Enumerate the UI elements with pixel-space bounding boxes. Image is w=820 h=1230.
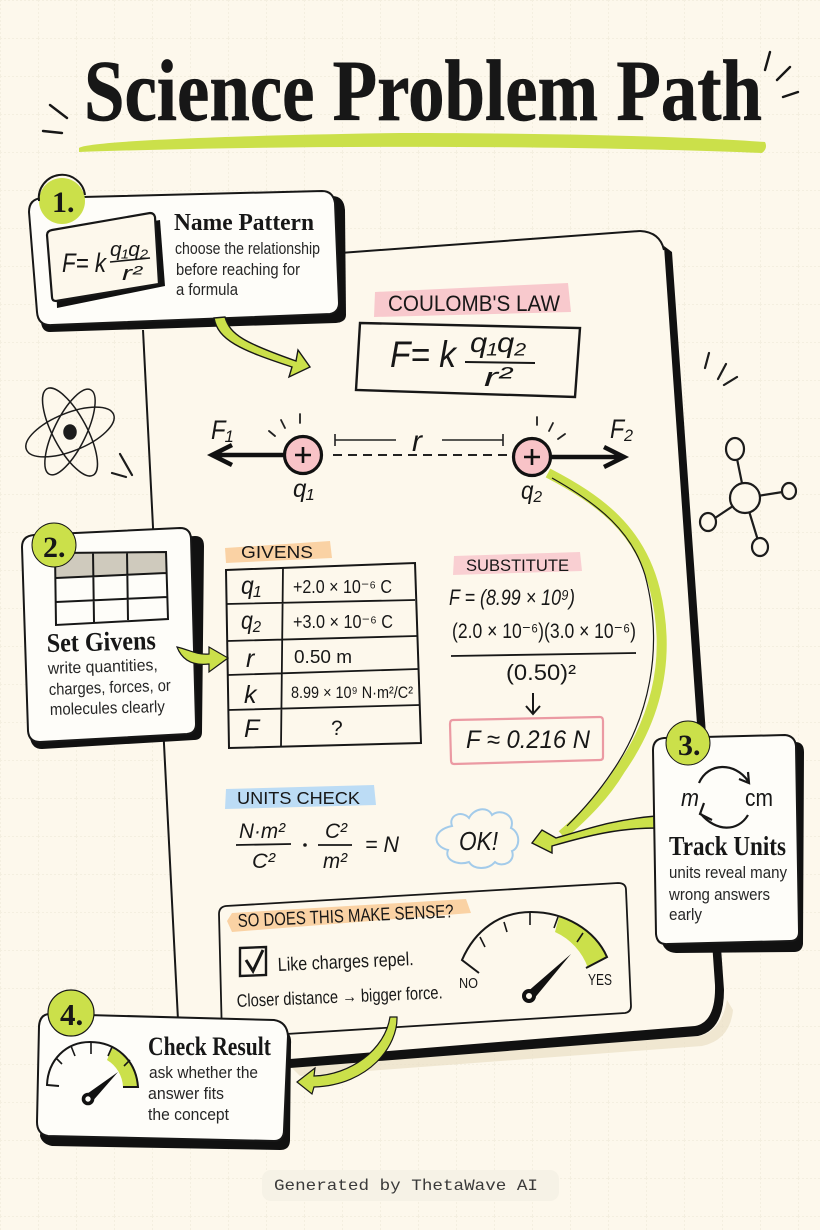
badge 4: 4. bbox=[60, 997, 83, 1032]
givens table: ? bbox=[331, 717, 343, 740]
card 4: check result: Check Result bbox=[148, 1032, 271, 1061]
charge diagram: r bbox=[412, 425, 423, 458]
formula box bbox=[356, 323, 580, 397]
card 1: name pattern bbox=[29, 175, 346, 332]
givens table: 0.50 m bbox=[294, 647, 352, 667]
small gauge bbox=[47, 1042, 138, 1104]
gauge: YES bbox=[588, 972, 612, 989]
badge 2: 2. bbox=[43, 531, 66, 564]
badge 1 bbox=[39, 175, 85, 224]
units equation: N·m² bbox=[239, 820, 286, 843]
charge diagram: q₂ bbox=[521, 477, 542, 505]
card 3: track units: units reveal many bbox=[669, 864, 788, 882]
card 4: check result: ask whether the bbox=[149, 1064, 258, 1082]
card 4: check result: the concept bbox=[148, 1106, 229, 1124]
OK cloud bbox=[436, 809, 518, 868]
card 4: check result: answer fits bbox=[148, 1085, 224, 1103]
formula box: q₁q₂ bbox=[470, 327, 526, 358]
heading: so does this make sense: SO DOES THIS MAKE SENSE? bbox=[237, 900, 454, 931]
formula box: F= k bbox=[390, 334, 458, 375]
units equation bbox=[236, 820, 399, 873]
givens table: r bbox=[246, 645, 256, 673]
givens table: q₂ bbox=[241, 607, 261, 635]
givens table: k bbox=[244, 681, 258, 709]
givens table: F bbox=[244, 715, 261, 743]
card 3: track units: wrong answers bbox=[668, 886, 770, 904]
arrow: card 2 to table bbox=[177, 647, 228, 672]
heading: Units Check: UNITS CHECK bbox=[237, 788, 360, 808]
arrow: card 1 to formula bbox=[214, 317, 310, 377]
heading: Units Check bbox=[225, 785, 376, 809]
mini formula card: F= k bbox=[62, 248, 107, 278]
gauge bbox=[459, 912, 612, 1001]
givens table: 8.99 × 10⁹ N·m²/C² bbox=[291, 683, 413, 702]
card 3: track units: early bbox=[669, 906, 703, 924]
checkbox bbox=[240, 947, 266, 976]
OK cloud: OK! bbox=[459, 826, 498, 856]
substitution working: F = (8.99 × 10⁹) bbox=[449, 585, 575, 610]
card 1: name pattern: a formula bbox=[176, 281, 239, 299]
force arrow F2 bbox=[550, 447, 624, 467]
check text: Like charges repel. bbox=[277, 949, 414, 976]
charge diagram: F₁ bbox=[211, 415, 233, 445]
card 2: set givens bbox=[22, 523, 204, 749]
panel: worksheet paper bbox=[143, 231, 733, 1076]
formula box: r² bbox=[484, 362, 514, 392]
sparks right of paper bbox=[705, 353, 737, 385]
arrow: sense check to card 4 bbox=[297, 1017, 397, 1094]
mini formula card: q₁q₂ bbox=[110, 239, 148, 261]
badge 4 bbox=[48, 990, 94, 1036]
givens table bbox=[226, 563, 421, 748]
card 3: track units bbox=[653, 721, 804, 953]
heading: Givens: GIVENS bbox=[241, 542, 313, 562]
atom icon bbox=[19, 381, 132, 483]
badge 3: 3. bbox=[678, 729, 700, 762]
charge diagram: F₂ bbox=[610, 414, 634, 444]
substitution working: (2.0 × 10⁻⁶)(3.0 × 10⁻⁶) bbox=[452, 620, 636, 643]
arrow: charge to OK bbox=[548, 473, 662, 835]
footer credit bbox=[262, 1170, 559, 1201]
result box bbox=[450, 717, 603, 764]
charge diagram bbox=[211, 414, 634, 505]
arrow: units card to OK bbox=[532, 816, 656, 853]
gauge: NO bbox=[459, 975, 478, 992]
conversion icon bbox=[681, 767, 773, 828]
card 2: set givens: write quantities, bbox=[47, 656, 158, 678]
distance text: Closer distance → bigger force. bbox=[236, 982, 443, 1011]
units equation: m² bbox=[323, 850, 348, 873]
conversion icon: cm bbox=[745, 785, 773, 812]
title sparks bbox=[43, 52, 798, 133]
conversion icon: m bbox=[681, 785, 699, 812]
distance bracket bbox=[335, 434, 503, 446]
table icon bbox=[55, 552, 168, 625]
panel: sense check bbox=[219, 883, 631, 1038]
card 2: set givens: Set Givens bbox=[46, 625, 156, 658]
distance dashed line bbox=[333, 454, 510, 456]
card 1: name pattern: Name Pattern bbox=[174, 210, 314, 236]
card 1: name pattern: before reaching for bbox=[176, 261, 300, 279]
card 2: set givens: molecules clearly bbox=[50, 698, 166, 719]
charge q1 bbox=[284, 436, 322, 474]
title underline highlight bbox=[79, 133, 766, 153]
heading: Coulomb's Law bbox=[374, 283, 571, 317]
units equation: C² bbox=[252, 850, 276, 873]
substitution working: (0.50)² bbox=[506, 660, 576, 685]
heading: Substitute bbox=[453, 552, 582, 575]
card 4: check result bbox=[37, 990, 291, 1150]
result box: F ≈ 0.216 N bbox=[466, 726, 591, 754]
givens table: +2.0 × 10⁻⁶ C bbox=[293, 577, 392, 597]
molecule icon bbox=[700, 438, 796, 556]
badge 3 bbox=[666, 721, 710, 765]
card 1: name pattern: choose the relationship bbox=[175, 240, 320, 258]
heading: Givens bbox=[225, 541, 332, 563]
card 2: set givens: charges, forces, or bbox=[49, 677, 172, 699]
heading: Substitute: SUBSTITUTE bbox=[466, 556, 569, 575]
givens table: q₁ bbox=[241, 572, 261, 600]
force arrow F1 bbox=[212, 445, 285, 465]
charge q2 bbox=[514, 438, 550, 476]
card 3: track units: Track Units bbox=[669, 831, 786, 861]
charge diagram: q₁ bbox=[293, 475, 314, 503]
heading: Coulomb's Law: COULOMB'S LAW bbox=[388, 291, 560, 316]
mini formula card bbox=[47, 213, 165, 308]
units equation: = N bbox=[365, 832, 399, 857]
givens table: +3.0 × 10⁻⁶ C bbox=[293, 612, 393, 632]
charge sparks bbox=[269, 414, 565, 439]
units equation: C² bbox=[325, 820, 348, 843]
badge 2 bbox=[32, 523, 76, 567]
badge 1: 1. bbox=[52, 186, 74, 219]
mini formula card: r² bbox=[122, 263, 144, 285]
footer credit: Generated by ThetaWave AI bbox=[274, 1177, 538, 1195]
substitution working bbox=[449, 585, 636, 714]
